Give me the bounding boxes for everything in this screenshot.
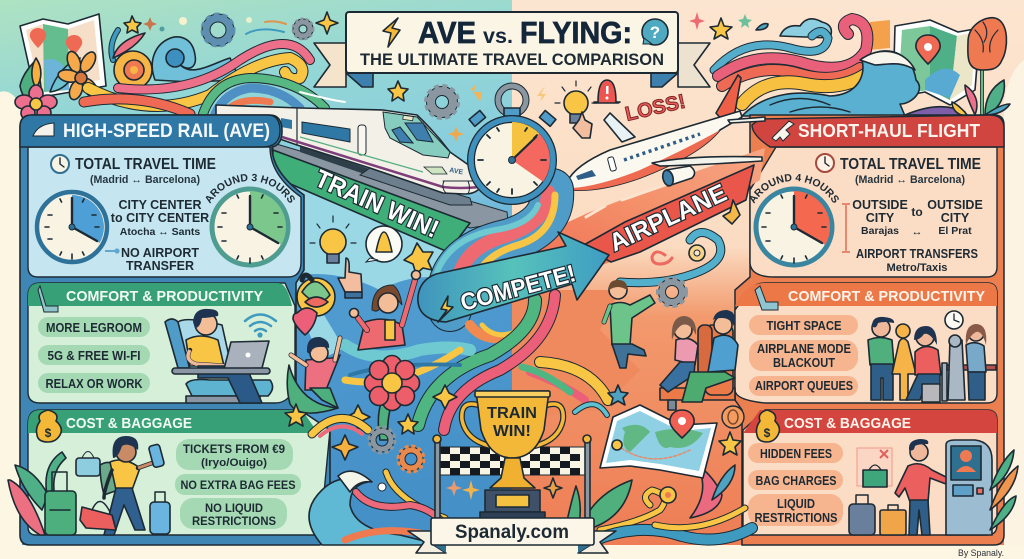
icon: small clock [51, 155, 69, 173]
pill: liquid restrictions [748, 494, 843, 526]
section: cost and baggage rail [8, 410, 330, 535]
light area under train banner [296, 170, 470, 360]
title ribbon tails [314, 43, 710, 87]
figure: queue of frustrated passengers [868, 311, 996, 402]
section: total travel time: Atocha ↔ Sants [120, 226, 200, 238]
icon: money bag: $ [45, 426, 52, 440]
site badge: Spanaly.com [455, 522, 569, 543]
pill: tight space: TIGHT SPACE [766, 319, 842, 333]
section: total travel time flight: to [911, 205, 923, 219]
section: total travel time flight: El Prat [938, 225, 972, 237]
figure: cheering woman [350, 270, 420, 350]
pill: hidden fees: HIDDEN FEES [760, 447, 832, 461]
figure: man at kiosk with bags [849, 439, 992, 535]
icon: seat [38, 286, 58, 312]
panel: short-haul flight [721, 114, 1005, 546]
decoration: top-right waves, map and flower [689, 12, 1010, 116]
icon: money bag [36, 410, 61, 442]
waves: bottom right [544, 463, 752, 540]
streak behind airplane [512, 148, 765, 290]
section: total travel time flight: AIRPORT TRANSFERS [856, 247, 978, 261]
pill: airport queues: AIRPORT QUEUES [755, 379, 853, 393]
flower [364, 356, 420, 440]
decoration: yarn knot [297, 275, 335, 316]
header: flight [752, 115, 1004, 147]
icon: seat flight [755, 286, 778, 310]
checkered flag [433, 435, 591, 518]
pill: no liquid restrictions: RESTRICTIONS [192, 514, 276, 528]
leaves right of kiosk [990, 450, 1018, 530]
section: total travel time flight: CITY [941, 211, 970, 225]
icon: gear [426, 86, 458, 118]
train [216, 105, 483, 205]
icon: lightning [438, 296, 453, 322]
small icons above plane side [388, 80, 688, 142]
section: total travel time: TOTAL TRAVEL TIME [75, 156, 216, 173]
icon: small clock flight [816, 154, 834, 172]
section: total travel time: TRANSFER [126, 259, 194, 273]
track under train [273, 143, 508, 228]
header: rail [20, 115, 280, 147]
title: AVE [418, 15, 476, 50]
pill: tickets: (Iryo/Ouigo) [201, 457, 267, 469]
section: total travel time: (Madrid ↔ Barcelona) [90, 174, 200, 186]
icon: question bubble: ? [650, 23, 660, 42]
art: lower bands [345, 290, 640, 430]
pill: wifi [38, 345, 150, 365]
figure: running man [604, 280, 655, 368]
pill: airplane mode blackout [749, 340, 858, 371]
decoration: top-left swirls and map [15, 14, 345, 120]
pill: tight space [749, 315, 858, 335]
decoration: blue star and wave swirl right [575, 385, 741, 455]
decoration: stars and gears lower left [285, 385, 457, 472]
icon: plane [772, 121, 794, 141]
pill: more legroom: MORE LEGROOM [46, 321, 142, 335]
chart: clock around 4 hours: AROUND 4 HOURS [750, 174, 839, 204]
pill: airplane mode blackout: BLACKOUT [773, 356, 835, 370]
trophy [462, 391, 563, 519]
chart: clock around 4 hours [750, 174, 839, 268]
figure: man with laptop on train seat [165, 309, 273, 403]
streak behind airplane: AIRPLANE [605, 179, 731, 257]
section: total travel time: NO AIRPORT [121, 246, 199, 260]
pill: wifi: 5G & FREE WI-FI [48, 349, 140, 363]
panel: high-speed rail [7, 114, 331, 546]
art: waves near gear right [620, 200, 740, 306]
pill: airplane mode blackout: AIRPLANE MODE [757, 342, 851, 356]
icon: train [33, 123, 54, 136]
pill: bag charges: BAG CHARGES [756, 474, 836, 488]
icon: money bag flight [756, 410, 779, 442]
section: comfort and productivity rail: COMFORT & PRODUCTIVITY [66, 288, 263, 305]
banner: train win: TRAIN WIN! [311, 165, 443, 244]
section: comfort and productivity flight: COMFORT & PRODUCTIVITY [788, 288, 985, 305]
icons: lightbulb, bell and hand left [310, 216, 433, 298]
text: loss: LOSS! [623, 91, 688, 126]
icon: gear right [658, 278, 686, 306]
icon: gears and stars top left [124, 12, 338, 46]
banner: compete: COMPETE! [458, 260, 579, 317]
figure: traveller with luggage [8, 436, 170, 535]
ribbons: rainbow from stopwatch [432, 190, 555, 310]
airplane [567, 75, 765, 190]
trophy: WIN! [493, 423, 531, 440]
chart: clock around 3 hours: AROUND 3 HOURS [206, 174, 295, 204]
pill: liquid restrictions: RESTRICTIONS [754, 511, 838, 525]
icon: question bubble [642, 19, 668, 45]
section: total travel time flight: ↔ [912, 226, 922, 238]
waves: bottom left [309, 471, 480, 545]
section: total travel time flight: CITY [866, 211, 895, 225]
header: flight: SHORT-HAUL FLIGHT [798, 120, 981, 141]
pill: relax or work [38, 373, 150, 393]
section: total travel time flight: OUTSIDE [927, 198, 983, 212]
section: comfort and productivity flight [735, 283, 997, 403]
pill: bag charges [748, 470, 843, 490]
section: total travel time: to CITY CENTER [111, 211, 209, 225]
title [346, 12, 678, 73]
section: cost and baggage rail: COST & BAGGAGE [66, 415, 192, 432]
pill: hidden fees [748, 443, 843, 463]
icon: alert bell [594, 80, 620, 103]
section: cost and baggage flight: COST & BAGGAGE [784, 415, 911, 432]
icon: light bulb with hand [555, 81, 597, 138]
pill: no extra bag fees: NO EXTRA BAG FEES [180, 478, 296, 492]
pill: more legroom [38, 317, 150, 337]
pill: no extra bag fees [175, 474, 301, 495]
figure: cheering child [287, 308, 340, 413]
section: total travel time flight: TOTAL TRAVEL TIME [840, 156, 981, 173]
section: total travel time flight: Metro/Taxis [886, 262, 948, 274]
section: total travel time flight: OUTSIDE [852, 198, 908, 212]
figure: seated couple [660, 310, 738, 410]
section: total travel time flight: (Madrid ↔ Barcelona) [855, 174, 965, 186]
title: vs. [483, 25, 513, 48]
chart: clock around 3 hours [206, 174, 295, 268]
icon: alarm badge [722, 406, 744, 428]
icon: wifi [245, 314, 276, 338]
pill: liquid restrictions: LIQUID [777, 497, 815, 511]
site badge [408, 518, 616, 553]
train: AVE [449, 167, 464, 176]
pill: tickets [176, 439, 293, 470]
section: total travel time [27, 146, 302, 278]
icon: money bag flight: $ [764, 426, 771, 440]
subtitle: THE ULTIMATE TRAVEL COMPARISON [360, 50, 664, 69]
section: total travel time flight: Barajas [861, 225, 899, 237]
pill: no liquid restrictions [180, 498, 287, 529]
chart: clock city center [37, 192, 107, 262]
credit: By Spanaly. [958, 548, 1004, 559]
section: cost and baggage flight [722, 406, 997, 535]
header: rail: HIGH-SPEED RAIL (AVE) [63, 121, 270, 142]
pill: no liquid restrictions: NO LIQUID [205, 501, 263, 515]
pill: relax or work: RELAX OR WORK [46, 377, 142, 391]
pill: tickets: TICKETS FROM €9 [183, 442, 285, 456]
section: total travel time: CITY CENTER [118, 198, 202, 212]
stopwatch [469, 86, 556, 201]
section: total travel time flight [749, 148, 998, 278]
banner: train win [272, 150, 470, 252]
banner: compete [418, 232, 609, 322]
map [600, 405, 717, 478]
section: comfort and productivity rail [28, 283, 295, 403]
pill: airport queues [749, 376, 858, 396]
icon: lightning [383, 18, 400, 47]
trophy: TRAIN [487, 405, 537, 422]
title: FLYING: [520, 15, 632, 50]
